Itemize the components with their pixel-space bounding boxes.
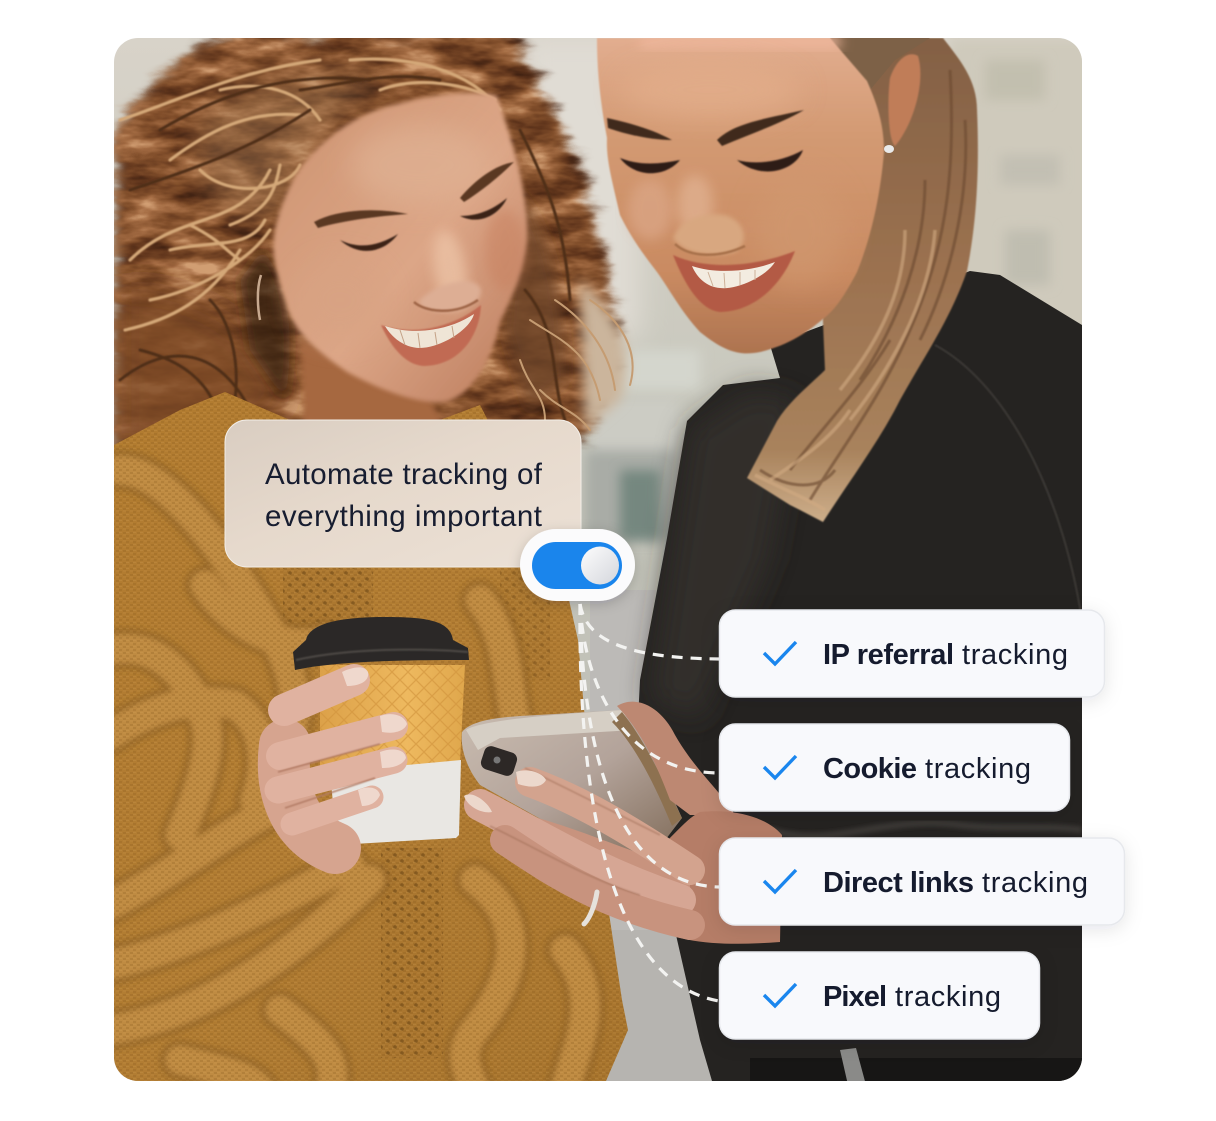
right hand holding phone [464, 702, 782, 944]
check icon [764, 870, 796, 892]
hand back and wrist [670, 812, 782, 944]
left woman: smile [381, 305, 481, 366]
card label: Pixel [823, 981, 887, 1013]
right woman: earring [884, 145, 894, 153]
card: Pixel tracking [720, 952, 1040, 1039]
card label: tracking [962, 639, 1068, 671]
right woman: ear [888, 54, 920, 146]
card label: IP referral [823, 639, 954, 671]
right woman: brows [607, 110, 804, 146]
cup-hand nails [342, 667, 407, 806]
right-hand nails [464, 770, 546, 812]
photo: two women looking at a phone [110, 30, 1090, 1090]
phone camera [480, 746, 518, 776]
cup sleeve white [330, 760, 461, 845]
sweater ribbed panels [283, 568, 550, 1058]
right woman: nose [673, 214, 744, 255]
right woman: ponytail [747, 38, 978, 522]
coffee cup and left hand [278, 617, 469, 848]
card label [823, 753, 1031, 785]
sweater cable highlights [110, 470, 585, 1090]
ring [584, 892, 597, 924]
left woman: closed eyes [340, 198, 507, 251]
card label: Direct links [823, 867, 974, 899]
right woman: face [597, 36, 920, 353]
right woman: smile [673, 251, 795, 312]
phone [462, 710, 682, 860]
card: IP referral tracking [720, 610, 1104, 697]
right woman: closed eyes [620, 150, 803, 173]
cup lid [293, 617, 469, 670]
right woman: black sweater [636, 271, 1090, 1085]
text bubble [225, 420, 581, 567]
left woman: hoop earring [258, 275, 261, 320]
fingers [480, 782, 690, 925]
card: Cookie tracking [720, 724, 1070, 811]
check icon [764, 984, 796, 1006]
toggle knob [581, 546, 619, 584]
left woman: brows [314, 162, 514, 228]
left woman: face [273, 93, 527, 402]
card label: tracking [895, 981, 1001, 1013]
left hand [278, 680, 394, 848]
check icon [764, 756, 796, 778]
check icon [764, 642, 796, 664]
card label: Cookie [823, 753, 917, 785]
card label: tracking [982, 867, 1088, 899]
infographic canvas [114, 38, 1130, 1081]
card label [823, 981, 1001, 1013]
left woman: hair [114, 30, 633, 460]
cup body [320, 665, 465, 770]
palm fill under fingers [538, 818, 690, 888]
sweater cable shadows [110, 470, 585, 1090]
card label: tracking [925, 753, 1031, 785]
dashed connector lines [580, 604, 719, 1001]
photo background: blurred street [114, 38, 1090, 1090]
bubble text: everything important [265, 500, 542, 533]
toggle switch [520, 529, 635, 601]
sweater knit texture [114, 390, 634, 1090]
bubble text [265, 458, 543, 533]
card label [823, 639, 1068, 671]
left woman: neck [298, 342, 443, 420]
card label [823, 867, 1088, 899]
card: Direct links tracking [720, 838, 1124, 925]
left woman: nose [419, 281, 481, 312]
left woman: mustard sweater [110, 390, 634, 1090]
bubble text: Automate tracking of [265, 458, 543, 491]
